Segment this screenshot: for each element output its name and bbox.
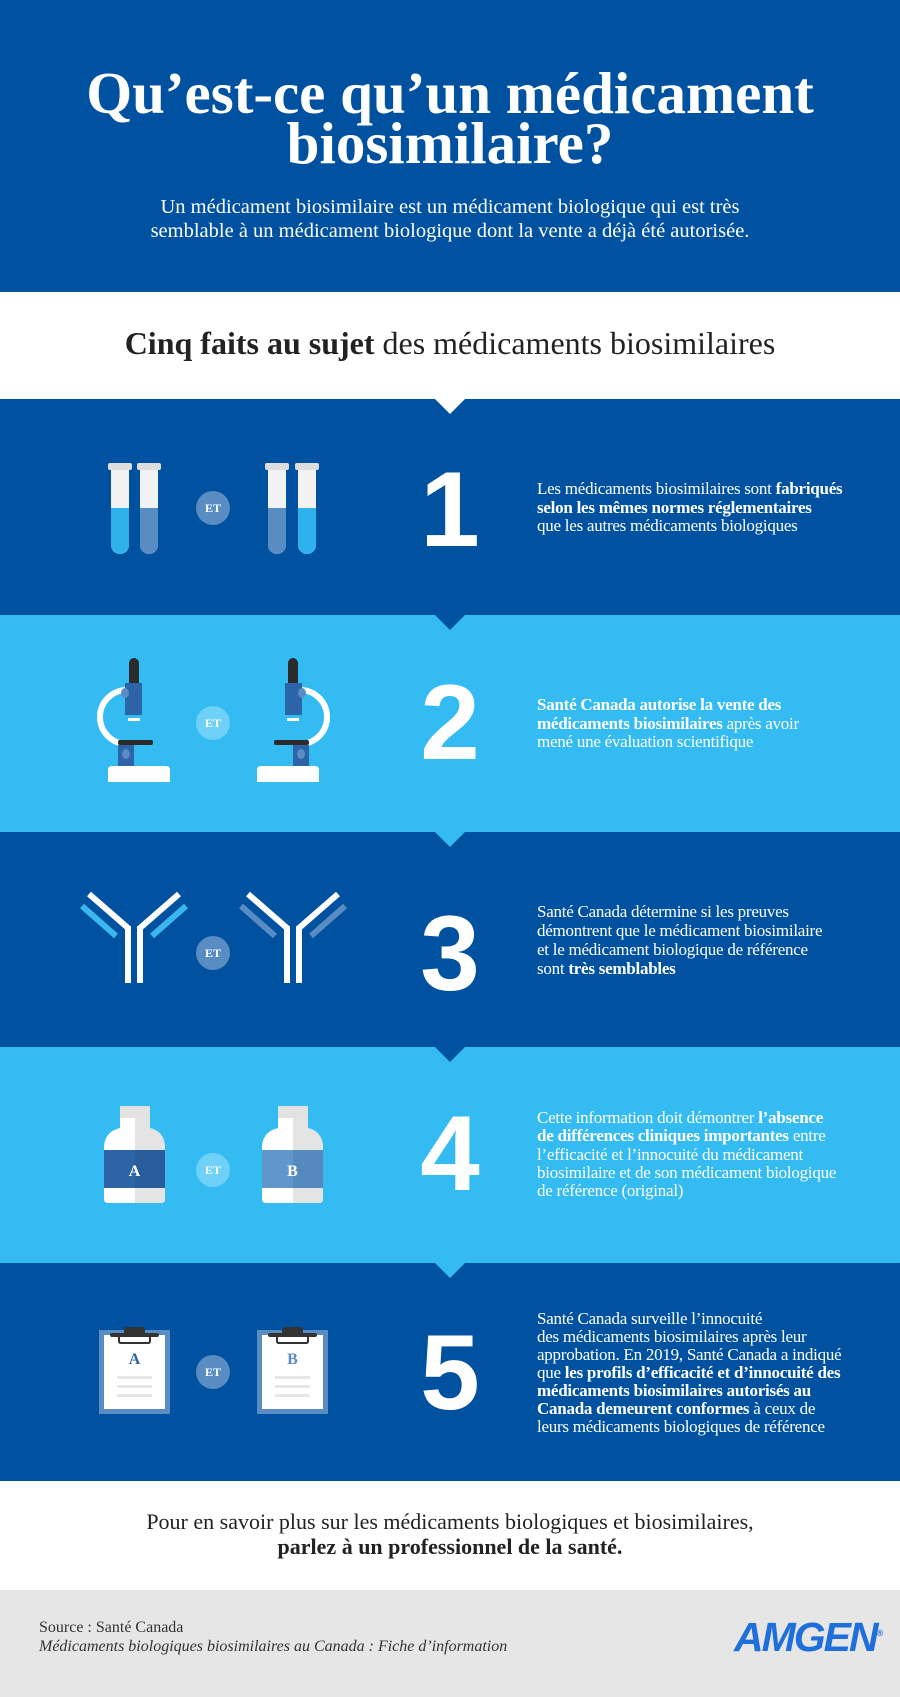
ET badge 5: ET <box>205 1365 221 1379</box>
number 5: 5 <box>420 1312 480 1432</box>
ET badge 4: ET <box>205 1163 221 1177</box>
header panel <box>0 0 900 292</box>
text: fact 3: Santé Canada détermine si les preuves <box>537 902 789 921</box>
subtitle <box>151 196 749 242</box>
icon: test tubes left <box>108 463 161 554</box>
text: fact 2: médicaments biosimilaires après avoir <box>537 714 799 732</box>
number 1: 1 <box>420 449 480 569</box>
text: fact 2: Santé Canada autorise la vente des <box>537 695 781 714</box>
text: fact 4: l’efficacité et l’innocuité du médicament <box>537 1145 803 1164</box>
text: fact 1: que les autres médicaments biologiques <box>537 516 798 535</box>
icon: clipboard A: A <box>129 1351 141 1368</box>
icon: bottle A: A <box>129 1163 141 1180</box>
ET badge 5 <box>196 1355 230 1389</box>
text: fact 5: médicaments biosimilaires autorisés au <box>537 1381 811 1400</box>
icon: antibody left <box>82 894 186 983</box>
ET badge 1: ET <box>205 501 221 515</box>
number 4: 4 <box>420 1093 480 1213</box>
pointers <box>435 399 465 1278</box>
text: fact 5 <box>537 1309 842 1436</box>
text: fact 5: Santé Canada surveille l’innocuité <box>537 1309 762 1328</box>
icon: clipboard B <box>257 1327 328 1414</box>
ET badge 2: ET <box>205 716 221 730</box>
closing call to action <box>146 1509 754 1559</box>
panel: fact 2 <box>0 615 900 832</box>
panel: fact 4 <box>0 1047 900 1263</box>
icon: clipboard B: B <box>287 1351 298 1368</box>
text: fact 4 <box>537 1108 836 1200</box>
icon: microscope right <box>257 658 327 782</box>
ET badge 3 <box>196 936 230 970</box>
panel: fact 5 <box>0 1263 900 1481</box>
panel: fact 3 <box>0 832 900 1047</box>
text: fact 3 <box>537 902 822 978</box>
icon: clipboard A <box>99 1327 170 1414</box>
number 2: 2 <box>420 662 480 782</box>
title: Qu’est-ce qu’un médicament <box>86 60 814 126</box>
subtitle: Un médicament biosimilaire est un médicament biologique qui est très <box>160 196 740 218</box>
title: biosimilaire? <box>287 110 613 176</box>
text: fact 5: que les profils d’efficacité et d’innocuité des <box>537 1363 840 1382</box>
text: fact 4: Cette information doit démontrer l’absence <box>537 1108 823 1127</box>
closing call to action: Pour en savoir plus sur les médicaments biologiques et biosimilaires, <box>146 1509 754 1534</box>
section heading: Cinq faits au sujet des médicaments biosimilaires <box>125 325 775 361</box>
text: fact 2 <box>537 695 800 751</box>
icon: microscope left <box>100 658 170 782</box>
text: fact 4: de différences cliniques importantes entre <box>537 1126 826 1145</box>
text: fact 1: Les médicaments biosimilaires sont fabriqués <box>537 479 842 498</box>
icon: antibody right <box>241 894 345 983</box>
text: fact 5: des médicaments biosimilaires après leur <box>537 1327 806 1346</box>
ET badge 2 <box>196 706 230 740</box>
text: fact 5: Canada demeurent conformes à ceux de <box>537 1399 815 1418</box>
source note: Médicaments biologiques biosimilaires au Canada : Fiche d’information <box>39 1638 507 1655</box>
text: fact 1 <box>537 479 842 535</box>
text: fact 3: sont très semblables <box>537 959 676 978</box>
ET badge 3: ET <box>205 946 221 960</box>
text: fact 5: leurs médicaments biologiques de référence <box>537 1417 825 1436</box>
text: fact 2: mené une évaluation scientifique <box>537 732 753 751</box>
source note <box>38 1619 507 1655</box>
ET badge 1 <box>196 491 230 525</box>
closing call to action: parlez à un professionnel de la santé. <box>278 1534 622 1559</box>
title <box>86 60 814 176</box>
subtitle: semblable à un médicament biologique dont la vente a déjà été autorisée. <box>151 220 749 242</box>
text: fact 4: de référence (original) <box>537 1181 683 1200</box>
text: fact 3: et le médicament biologique de référence <box>537 940 808 959</box>
ET badge 4 <box>196 1153 230 1187</box>
text: fact 4: biosimilaire et de son médicament biologique <box>537 1163 836 1182</box>
icon: bottle B: B <box>287 1163 298 1180</box>
icon: bottle B <box>262 1106 323 1203</box>
text: fact 5: approbation. En 2019, Santé Canada a indiqué <box>537 1345 841 1364</box>
footer band <box>0 1590 900 1697</box>
source note: Source : Santé Canada <box>39 1619 183 1636</box>
logo: AMGEN: AMGEN® <box>734 1614 883 1660</box>
panel: fact 1 <box>0 399 900 615</box>
number 3: 3 <box>420 893 480 1013</box>
icon: test tubes right <box>265 463 319 554</box>
icon: bottle A <box>104 1106 165 1203</box>
text: fact 1: selon les mêmes normes réglementaires <box>537 498 812 516</box>
text: fact 3: démontrent que le médicament biosimilaire <box>537 921 822 940</box>
